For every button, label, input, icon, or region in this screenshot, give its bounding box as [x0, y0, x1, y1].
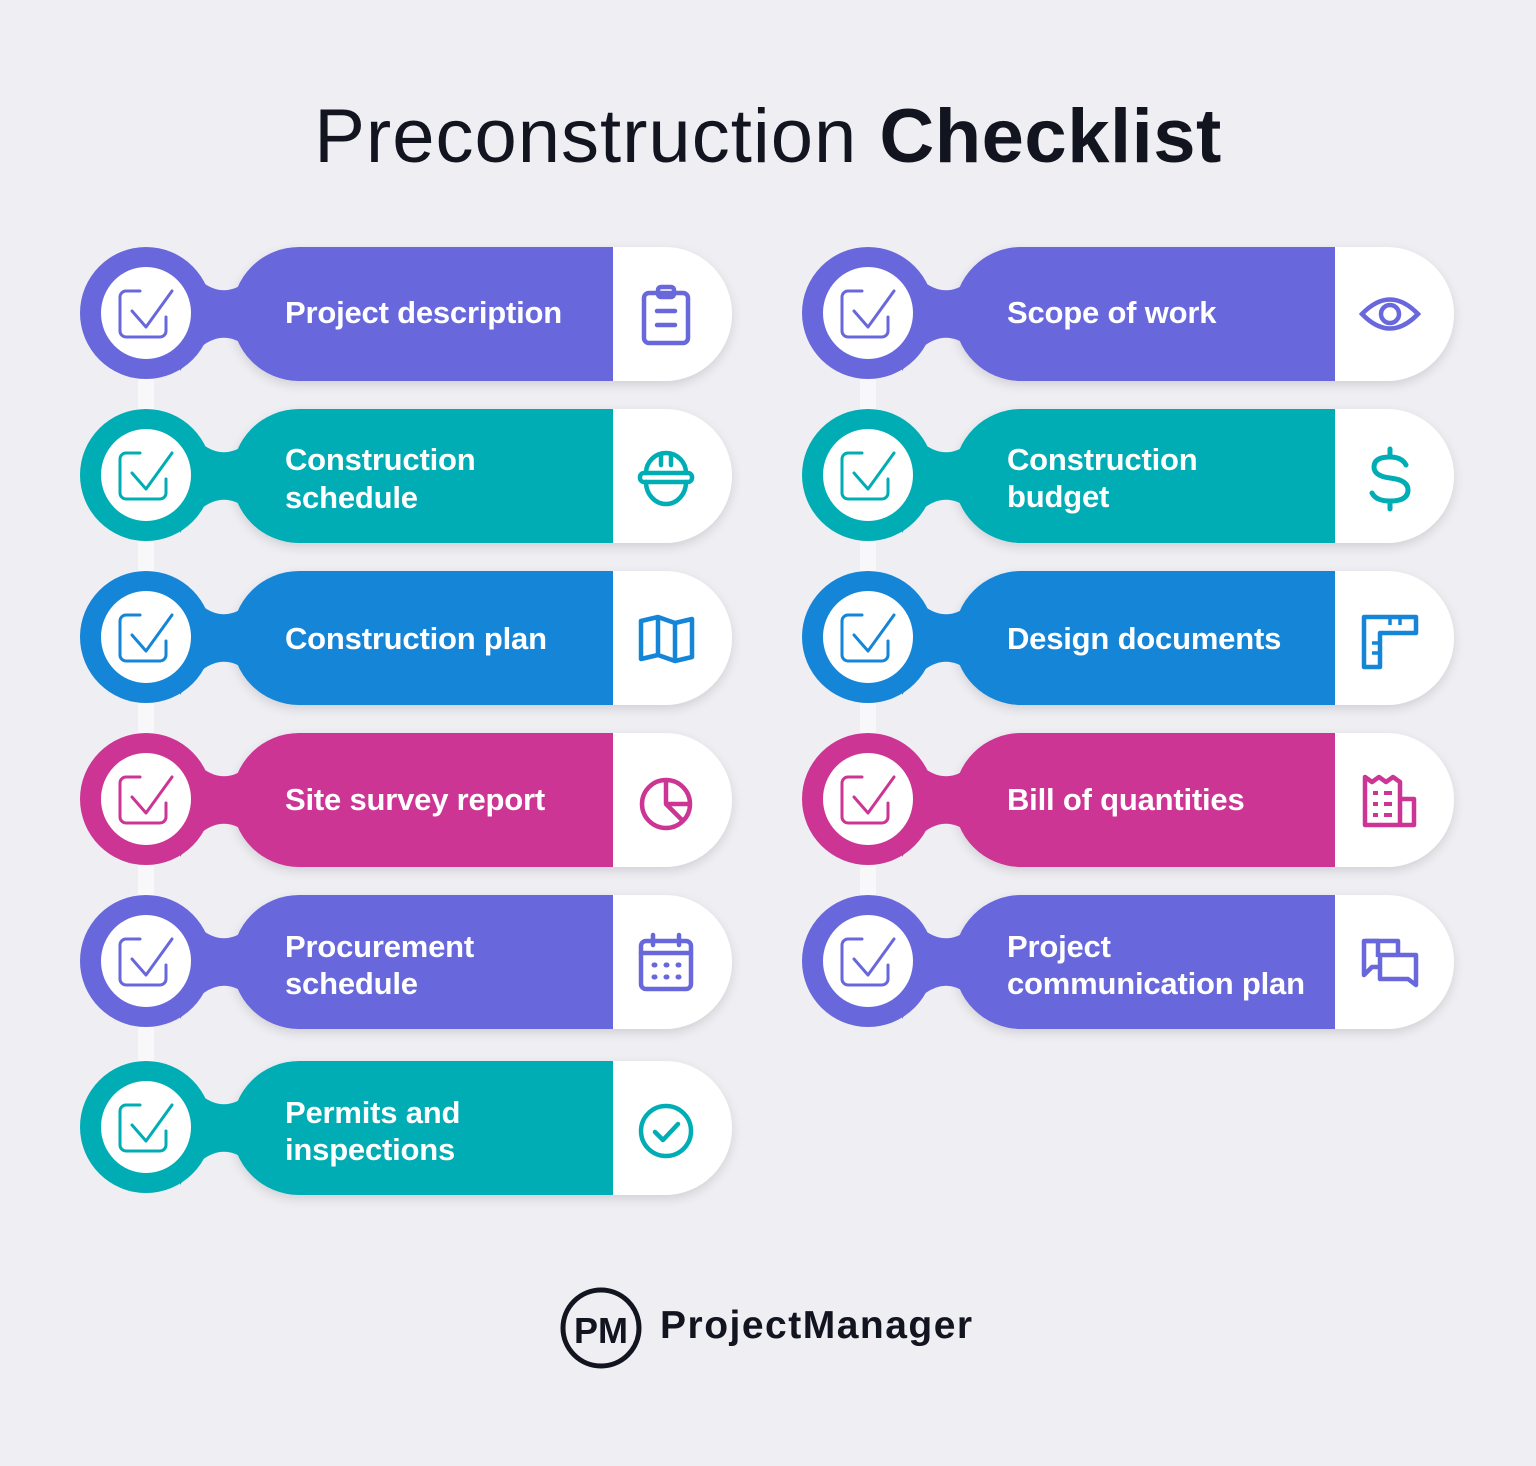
icon: chat bubbles: [1364, 941, 1416, 985]
icon: dollar: [1372, 449, 1408, 509]
card: Permits and inspections: Permits and: [285, 1095, 460, 1130]
icon: ruler square: [1364, 617, 1416, 667]
card: Construction plan: [80, 571, 732, 705]
icon: checkbox: [120, 453, 172, 499]
card: Procurement schedule: Procurement: [285, 929, 474, 964]
card: Construction budget: budget: [1007, 479, 1109, 514]
card: Scope of work: [802, 247, 1454, 381]
card: Site survey report: Site survey report: [285, 782, 545, 817]
card: Site survey report: [80, 733, 732, 867]
card: Procurement schedule: schedule: [285, 966, 418, 1001]
icon: checkbox: [842, 777, 894, 823]
connector line left: [138, 320, 154, 1130]
card: Construction plan: Construction plan: [285, 621, 547, 656]
logo: ProjectManager: PM: [574, 1310, 628, 1351]
connector line right: [860, 320, 876, 970]
card: Project communication plan: communication plan: [1007, 966, 1305, 1001]
card: Permits and inspections: inspections: [285, 1132, 455, 1167]
icon: checkbox: [120, 615, 172, 661]
card: Project communication plan: Project: [1007, 929, 1111, 964]
title: Preconstruction Checklist: [314, 94, 1222, 179]
card: Construction schedule: Construction: [285, 442, 475, 477]
card: Project communication plan: [802, 895, 1454, 1029]
card: Project description: [80, 247, 732, 381]
icon: checkbox: [842, 453, 894, 499]
icon: eye: [1362, 300, 1418, 328]
card: Design documents: [802, 571, 1454, 705]
card: Permits and inspections: [80, 1061, 732, 1195]
icon: pie chart: [642, 780, 690, 828]
card: Construction budget: [802, 409, 1454, 543]
icon: receipt: [1365, 777, 1414, 825]
icon: hard hat: [640, 453, 692, 504]
card: Procurement schedule: [80, 895, 732, 1029]
icon: calendar: [641, 935, 691, 989]
logo: ProjectManager: [563, 1290, 974, 1366]
card: Scope of work: Scope of work: [1007, 295, 1217, 330]
card: Construction schedule: schedule: [285, 480, 418, 515]
card: Construction schedule: [80, 409, 732, 543]
icon: checkbox: [842, 291, 894, 337]
logo: ProjectManager: ProjectManager: [660, 1304, 974, 1347]
icon: checkbox: [120, 777, 172, 823]
card: Bill of quantities: [802, 733, 1454, 867]
card: Project description: Project description: [285, 295, 562, 330]
card: Construction budget: Construction: [1007, 442, 1197, 477]
icon: checkbox: [120, 939, 172, 985]
icon: checkbox: [120, 1105, 172, 1151]
icon: check circle: [641, 1106, 691, 1156]
icon: checkbox: [842, 939, 894, 985]
card: Bill of quantities: Bill of quantities: [1007, 782, 1245, 817]
icon: checkbox: [842, 615, 894, 661]
card: Design documents: Design documents: [1007, 621, 1281, 656]
icon: map: [641, 617, 692, 661]
icon: clipboard: [644, 287, 688, 343]
icon: checkbox: [120, 291, 172, 337]
